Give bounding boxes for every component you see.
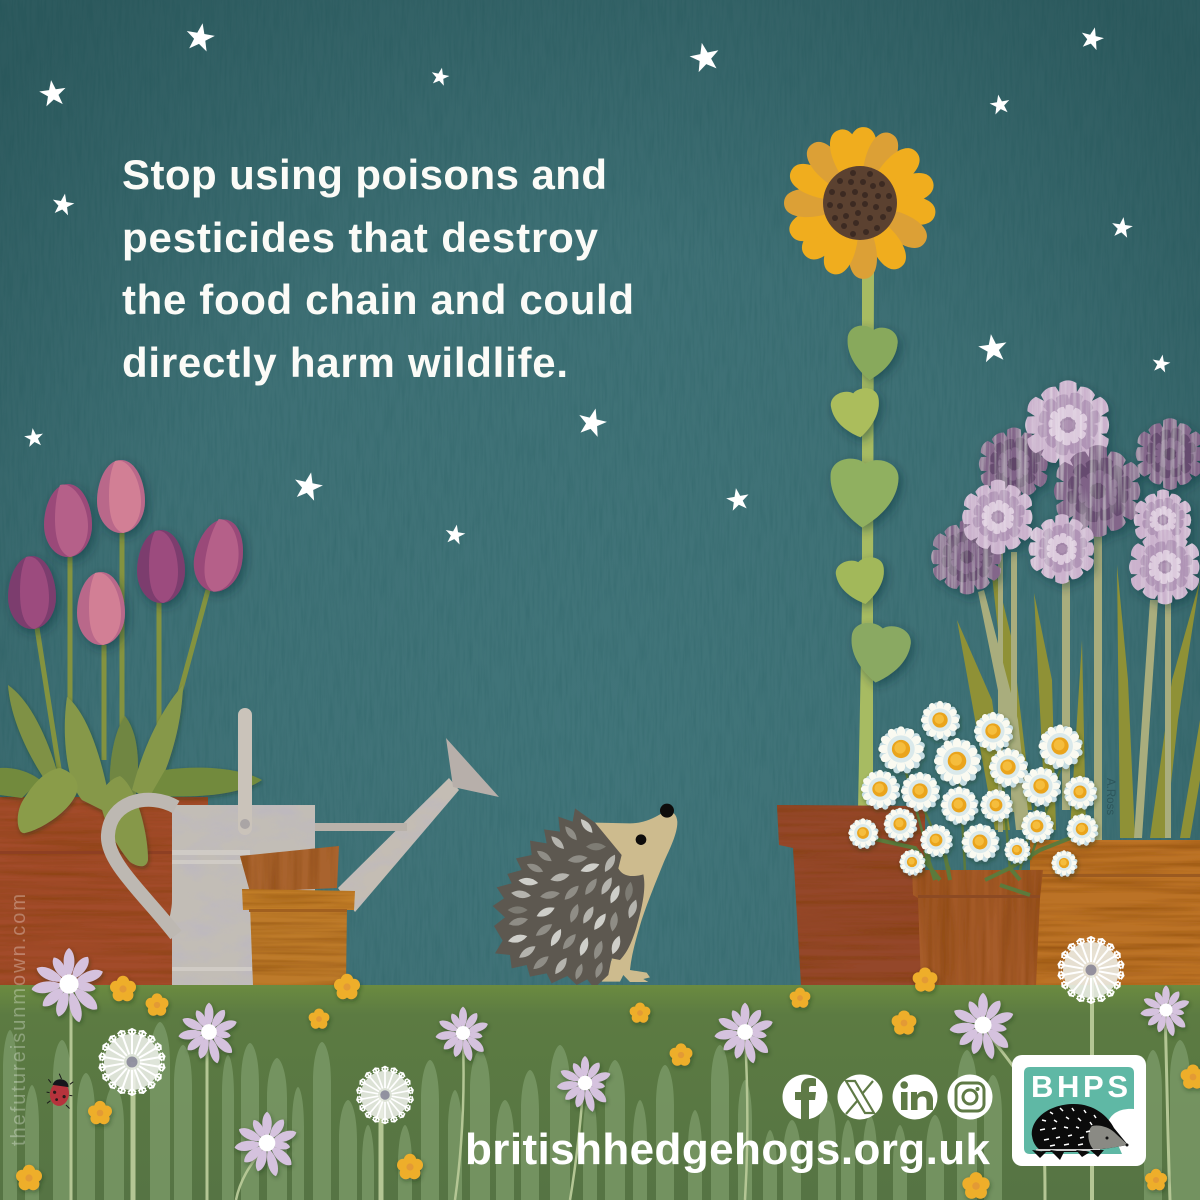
tulips: [0, 460, 262, 866]
logo letters: BHPS: [1031, 1069, 1128, 1104]
logo teal panel: [1024, 1067, 1134, 1154]
main message text: the food chain and could: [122, 276, 634, 323]
daisy flower heads: [845, 697, 1102, 880]
buttercups: [16, 967, 1200, 1199]
can spout rose: [446, 738, 499, 797]
can brace: [315, 823, 407, 831]
allium plant with purple flowers: [931, 380, 1200, 840]
dandelion clocks: [99, 937, 1124, 1123]
logo white card: [1012, 1055, 1146, 1166]
hedgehog spiny body: [493, 808, 644, 988]
ladybird: [45, 1072, 75, 1109]
daisy pot: [912, 870, 1043, 985]
main message text: Stop using poisons and: [122, 151, 607, 198]
meadow flower stems: [71, 975, 1170, 1200]
meadow purple daisies: [31, 948, 1190, 1177]
BHPS logo: [1012, 1055, 1146, 1166]
tulip leaves: [0, 685, 262, 866]
main message text: directly harm wildlife.: [122, 339, 568, 386]
grass blades: [3, 1022, 1200, 1200]
main message text: [122, 151, 634, 386]
can bands: [172, 850, 252, 971]
hedgehog: [493, 804, 677, 988]
icon: instagram: [948, 1074, 992, 1120]
tulip heads: [8, 460, 250, 645]
right flower pots: [777, 805, 1200, 985]
left terracotta pot: [0, 797, 208, 985]
stars: [23, 21, 1172, 545]
social media icons: [782, 1074, 992, 1120]
website url: britishhedgehogs.org.uk: [465, 1125, 991, 1174]
allium stems: [978, 530, 1171, 840]
can body: [169, 805, 315, 985]
can curved handle: [108, 800, 176, 935]
daisies: [845, 697, 1102, 895]
tulip stems: [37, 532, 208, 790]
logo hedgehog: [1032, 1104, 1128, 1160]
sunflower head: [784, 126, 937, 280]
watering can: [108, 708, 499, 985]
website watermark: thefutureisunmown.com: [8, 894, 30, 1146]
daisy foliage: [870, 750, 1078, 895]
icon: facebook: [782, 1074, 828, 1120]
icon: X: [838, 1074, 882, 1120]
hedgehog head and legs: [595, 811, 677, 982]
sunflower: [784, 126, 937, 810]
orange planter: [1030, 840, 1200, 985]
icon: linkedin: [892, 1074, 938, 1120]
can spout: [338, 778, 459, 912]
artist signature: A.Ross: [1104, 778, 1116, 815]
small stacked orange pots: [240, 846, 355, 985]
allium flower heads: [931, 380, 1200, 604]
dark terracotta pot: [777, 805, 925, 985]
can carry handle: [238, 708, 252, 835]
hedgehog eye and nose: [636, 804, 674, 845]
allium leaves: [957, 540, 1200, 838]
main message text: pesticides that destroy: [122, 214, 599, 261]
hedgehog quills: [507, 817, 640, 981]
sunflower stalk with heart leaves: [828, 272, 913, 810]
grass ground: [0, 985, 1200, 1200]
